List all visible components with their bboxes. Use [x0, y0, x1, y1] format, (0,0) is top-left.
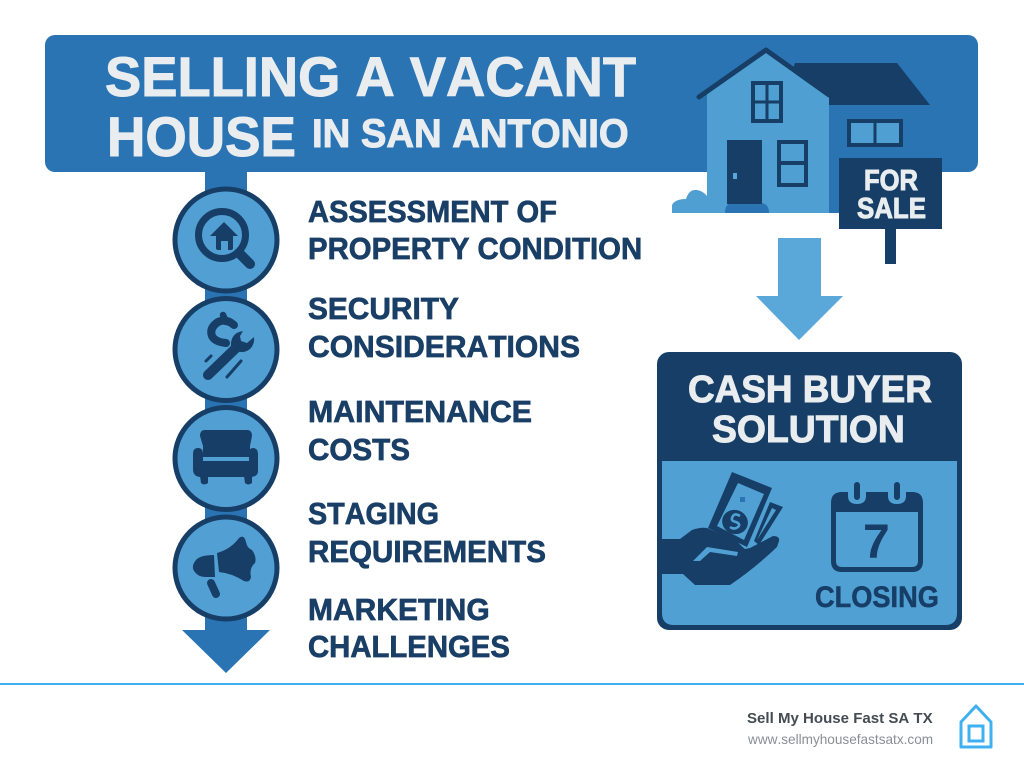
step 2 icon: dollar and wrench	[175, 298, 277, 400]
panel heading: CASH BUYER	[688, 368, 932, 410]
list item: staging: STAGING	[308, 497, 439, 531]
list item: maintenance: COSTS	[308, 433, 410, 467]
icon: calendar: 7	[863, 516, 890, 569]
title: SELLING A VACANT	[105, 45, 636, 108]
title: HOUSE	[107, 106, 296, 168]
sign text	[857, 163, 926, 224]
footer brand text: Sell My House Fast SA TX	[747, 710, 933, 727]
lower window	[779, 142, 806, 185]
door	[727, 140, 762, 204]
list item: marketing: MARKETING	[308, 593, 490, 627]
title: IN SAN ANTONIO	[312, 112, 629, 156]
door knob	[733, 173, 737, 179]
step	[725, 203, 769, 213]
list item: assessment	[308, 195, 642, 266]
list item: maintenance: MAINTENANCE	[308, 395, 532, 429]
panel heading: SOLUTION	[712, 408, 905, 450]
dark roof	[790, 63, 930, 105]
panel: cash buyer solution	[657, 352, 962, 630]
arrow: to cash buyer solution	[756, 238, 843, 340]
footer divider	[0, 683, 1024, 685]
header banner	[45, 35, 978, 172]
list item: maintenance	[308, 395, 532, 467]
footer brand text: www.sellmyhousefastsatx.com	[747, 732, 933, 747]
illustration: house with for sale sign	[672, 50, 942, 264]
step 1 icon: magnifier with house	[175, 189, 277, 291]
step 4 icon: megaphone	[175, 517, 277, 619]
list item: assessment: PROPERTY CONDITION	[308, 232, 642, 266]
panel body	[662, 461, 957, 625]
sign text: SALE	[857, 192, 926, 224]
list item: security: SECURITY	[308, 291, 459, 326]
list item: staging	[308, 497, 546, 569]
list item: security: CONSIDERATIONS	[308, 330, 580, 364]
footer icon: house logo	[961, 706, 991, 747]
sign board	[839, 158, 942, 229]
label: closing: CLOSING	[815, 581, 939, 614]
upper window	[753, 83, 781, 121]
right window	[849, 121, 901, 145]
title	[105, 45, 636, 168]
list item: assessment: ASSESSMENT OF	[308, 195, 557, 229]
panel frame	[657, 352, 962, 630]
icon: calendar	[831, 485, 923, 572]
list item: marketing: CHALLENGES	[308, 630, 510, 664]
footer brand text	[747, 710, 933, 747]
gable roof line	[699, 50, 829, 97]
list item: staging: REQUIREMENTS	[308, 535, 546, 569]
list item: marketing	[308, 593, 510, 664]
list item: security	[308, 291, 580, 364]
bush	[672, 190, 707, 213]
sign post	[885, 228, 896, 264]
panel heading	[688, 368, 932, 450]
sign text: FOR	[864, 163, 918, 196]
right wing	[829, 105, 925, 213]
icon: cash in hand	[662, 472, 783, 585]
step 3 icon: sofa	[175, 408, 277, 510]
main body	[707, 53, 829, 213]
timeline arrow	[182, 172, 270, 673]
